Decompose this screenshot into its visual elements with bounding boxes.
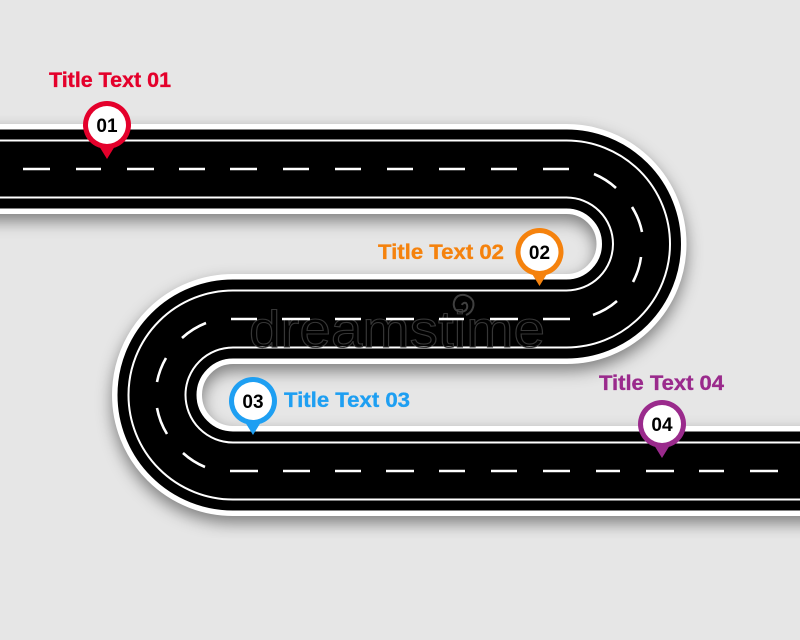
pin 02: 02 <box>529 243 550 264</box>
title 03: Title Text 03 <box>284 388 410 412</box>
watermark <box>249 295 545 359</box>
pin 02 <box>516 228 564 286</box>
pin 03 <box>229 377 277 435</box>
road edge lines <box>0 169 800 471</box>
step 02 <box>378 228 564 286</box>
step 01 <box>49 68 171 159</box>
winding road <box>0 169 800 471</box>
watermark wordmark: dreamstime <box>249 301 545 359</box>
title 02: Title Text 02 <box>378 240 504 264</box>
road asphalt <box>0 169 800 471</box>
lane dashes <box>23 169 778 471</box>
road inner asphalt <box>0 169 800 471</box>
step 03 <box>229 377 410 435</box>
step 04 <box>599 371 724 458</box>
pin 01: 01 <box>96 116 118 137</box>
title 01: Title Text 01 <box>49 68 171 92</box>
road shadow <box>0 176 800 478</box>
watermark spiral <box>454 295 473 315</box>
pin 03: 03 <box>242 392 264 413</box>
pin 04: 04 <box>651 415 673 436</box>
title 04: Title Text 04 <box>599 371 724 395</box>
road white border <box>0 169 800 471</box>
